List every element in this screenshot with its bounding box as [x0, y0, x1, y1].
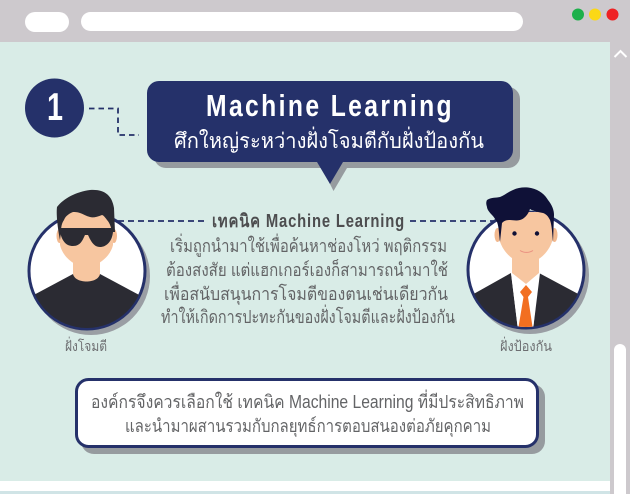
browser top bar: [0, 0, 630, 42]
dashed connector: [89, 108, 139, 135]
step number badge: 1: [47, 86, 63, 129]
title banner: [147, 81, 520, 191]
body text: เริ่มถูกนำมาใช้เพื่อค้นหาช่องโหว่ พฤติกรรม: [170, 233, 447, 257]
defender label: ฝั่งป้องกัน: [500, 337, 552, 354]
conclusion text: [91, 389, 524, 437]
attacker avatar: [29, 190, 150, 335]
step number badge: [25, 78, 84, 138]
defender avatar: [468, 187, 589, 335]
body text: [161, 233, 455, 327]
conclusion box: [76, 380, 545, 454]
conclusion text: องค์กรจึงควรเลือกใช้ เทคนิค Machine Learning ที่มีประสิทธิภาพ: [91, 389, 524, 412]
body text: ต้องสงสัย แต่แฮกเกอร์เองก็สามารถนำมาใช้: [166, 258, 448, 280]
body text: ทำให้เกิดการปะทะกันของฝั่งโจมตีและฝั่งป้องกัน: [161, 304, 455, 327]
body text: เพื่อสนับสนุนการโจมตีของตนเช่นเดียวกัน: [164, 281, 448, 305]
scrollbar: [614, 51, 626, 494]
attacker label: ฝั่งโจมตี: [65, 337, 107, 354]
technique heading: เทคนิค Machine Learning: [212, 211, 405, 231]
subtitle text: ศึกใหญ่ระหว่างฝั่งโจมตีกับฝั่งป้องกัน: [174, 126, 484, 153]
heading dashes: [118, 220, 496, 222]
title text: Machine Learning: [206, 88, 454, 123]
lower page strip: [0, 481, 610, 494]
conclusion text: และนำมาผสานรวมกับกลยุทธ์การตอบสนองต่อภัยคุกคาม: [125, 416, 491, 437]
